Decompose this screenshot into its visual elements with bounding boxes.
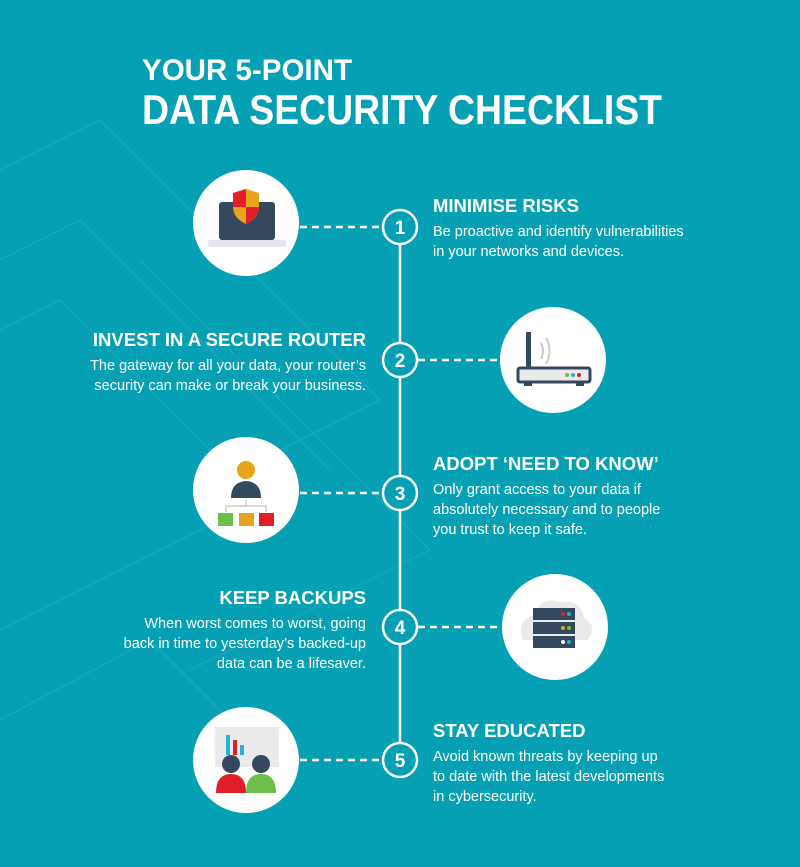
title: YOUR 5-POINT bbox=[142, 54, 352, 87]
text: minimise risks bbox=[433, 195, 684, 260]
text: minimise risks: MINIMISE RISKS bbox=[433, 195, 579, 216]
icon: router bbox=[500, 307, 606, 413]
text: keep backups: back in time to yesterday’s backed-up bbox=[124, 636, 366, 652]
icon: org hierarchy bbox=[193, 437, 299, 543]
text: stay educated: in cybersecurity. bbox=[433, 789, 537, 805]
text: need to know bbox=[433, 453, 660, 538]
number markers: 3 bbox=[395, 484, 405, 505]
text: minimise risks: Be proactive and identify vulnerabilities bbox=[433, 224, 684, 240]
text: secure router: INVEST IN A SECURE ROUTER bbox=[93, 329, 366, 350]
title bbox=[142, 54, 662, 133]
number markers: 5 bbox=[395, 751, 406, 772]
text: keep backups: data can be a lifesaver. bbox=[217, 656, 366, 672]
text: need to know: absolutely necessary and to people bbox=[433, 502, 660, 518]
number markers: 4 bbox=[395, 618, 406, 639]
text: need to know: ADOPT ‘NEED TO KNOW’ bbox=[433, 453, 659, 474]
text: stay educated bbox=[433, 720, 664, 805]
timeline bbox=[300, 227, 500, 760]
text: keep backups: KEEP BACKUPS bbox=[219, 587, 366, 608]
icon: cloud server bbox=[502, 574, 608, 680]
number markers: 2 bbox=[395, 351, 405, 372]
icon: presentation bbox=[193, 707, 299, 813]
text: secure router bbox=[90, 329, 366, 394]
text: minimise risks: in your networks and devices. bbox=[433, 244, 624, 260]
number markers bbox=[383, 210, 417, 777]
icon: laptop shield bbox=[193, 170, 299, 276]
text: secure router: security can make or break your business. bbox=[94, 378, 366, 394]
text: stay educated: to date with the latest developments bbox=[433, 769, 664, 785]
number markers: 1 bbox=[395, 218, 406, 239]
text: keep backups: When worst comes to worst, going bbox=[144, 616, 366, 632]
text: stay educated: Avoid known threats by keeping up bbox=[433, 749, 658, 765]
text: stay educated: STAY EDUCATED bbox=[433, 720, 585, 741]
text: keep backups bbox=[124, 587, 366, 672]
text: secure router: The gateway for all your data, your router’s bbox=[90, 358, 366, 374]
text: need to know: Only grant access to your data if bbox=[433, 482, 642, 498]
title: DATA SECURITY CHECKLIST bbox=[142, 86, 662, 133]
text: need to know: you trust to keep it safe. bbox=[433, 522, 587, 538]
